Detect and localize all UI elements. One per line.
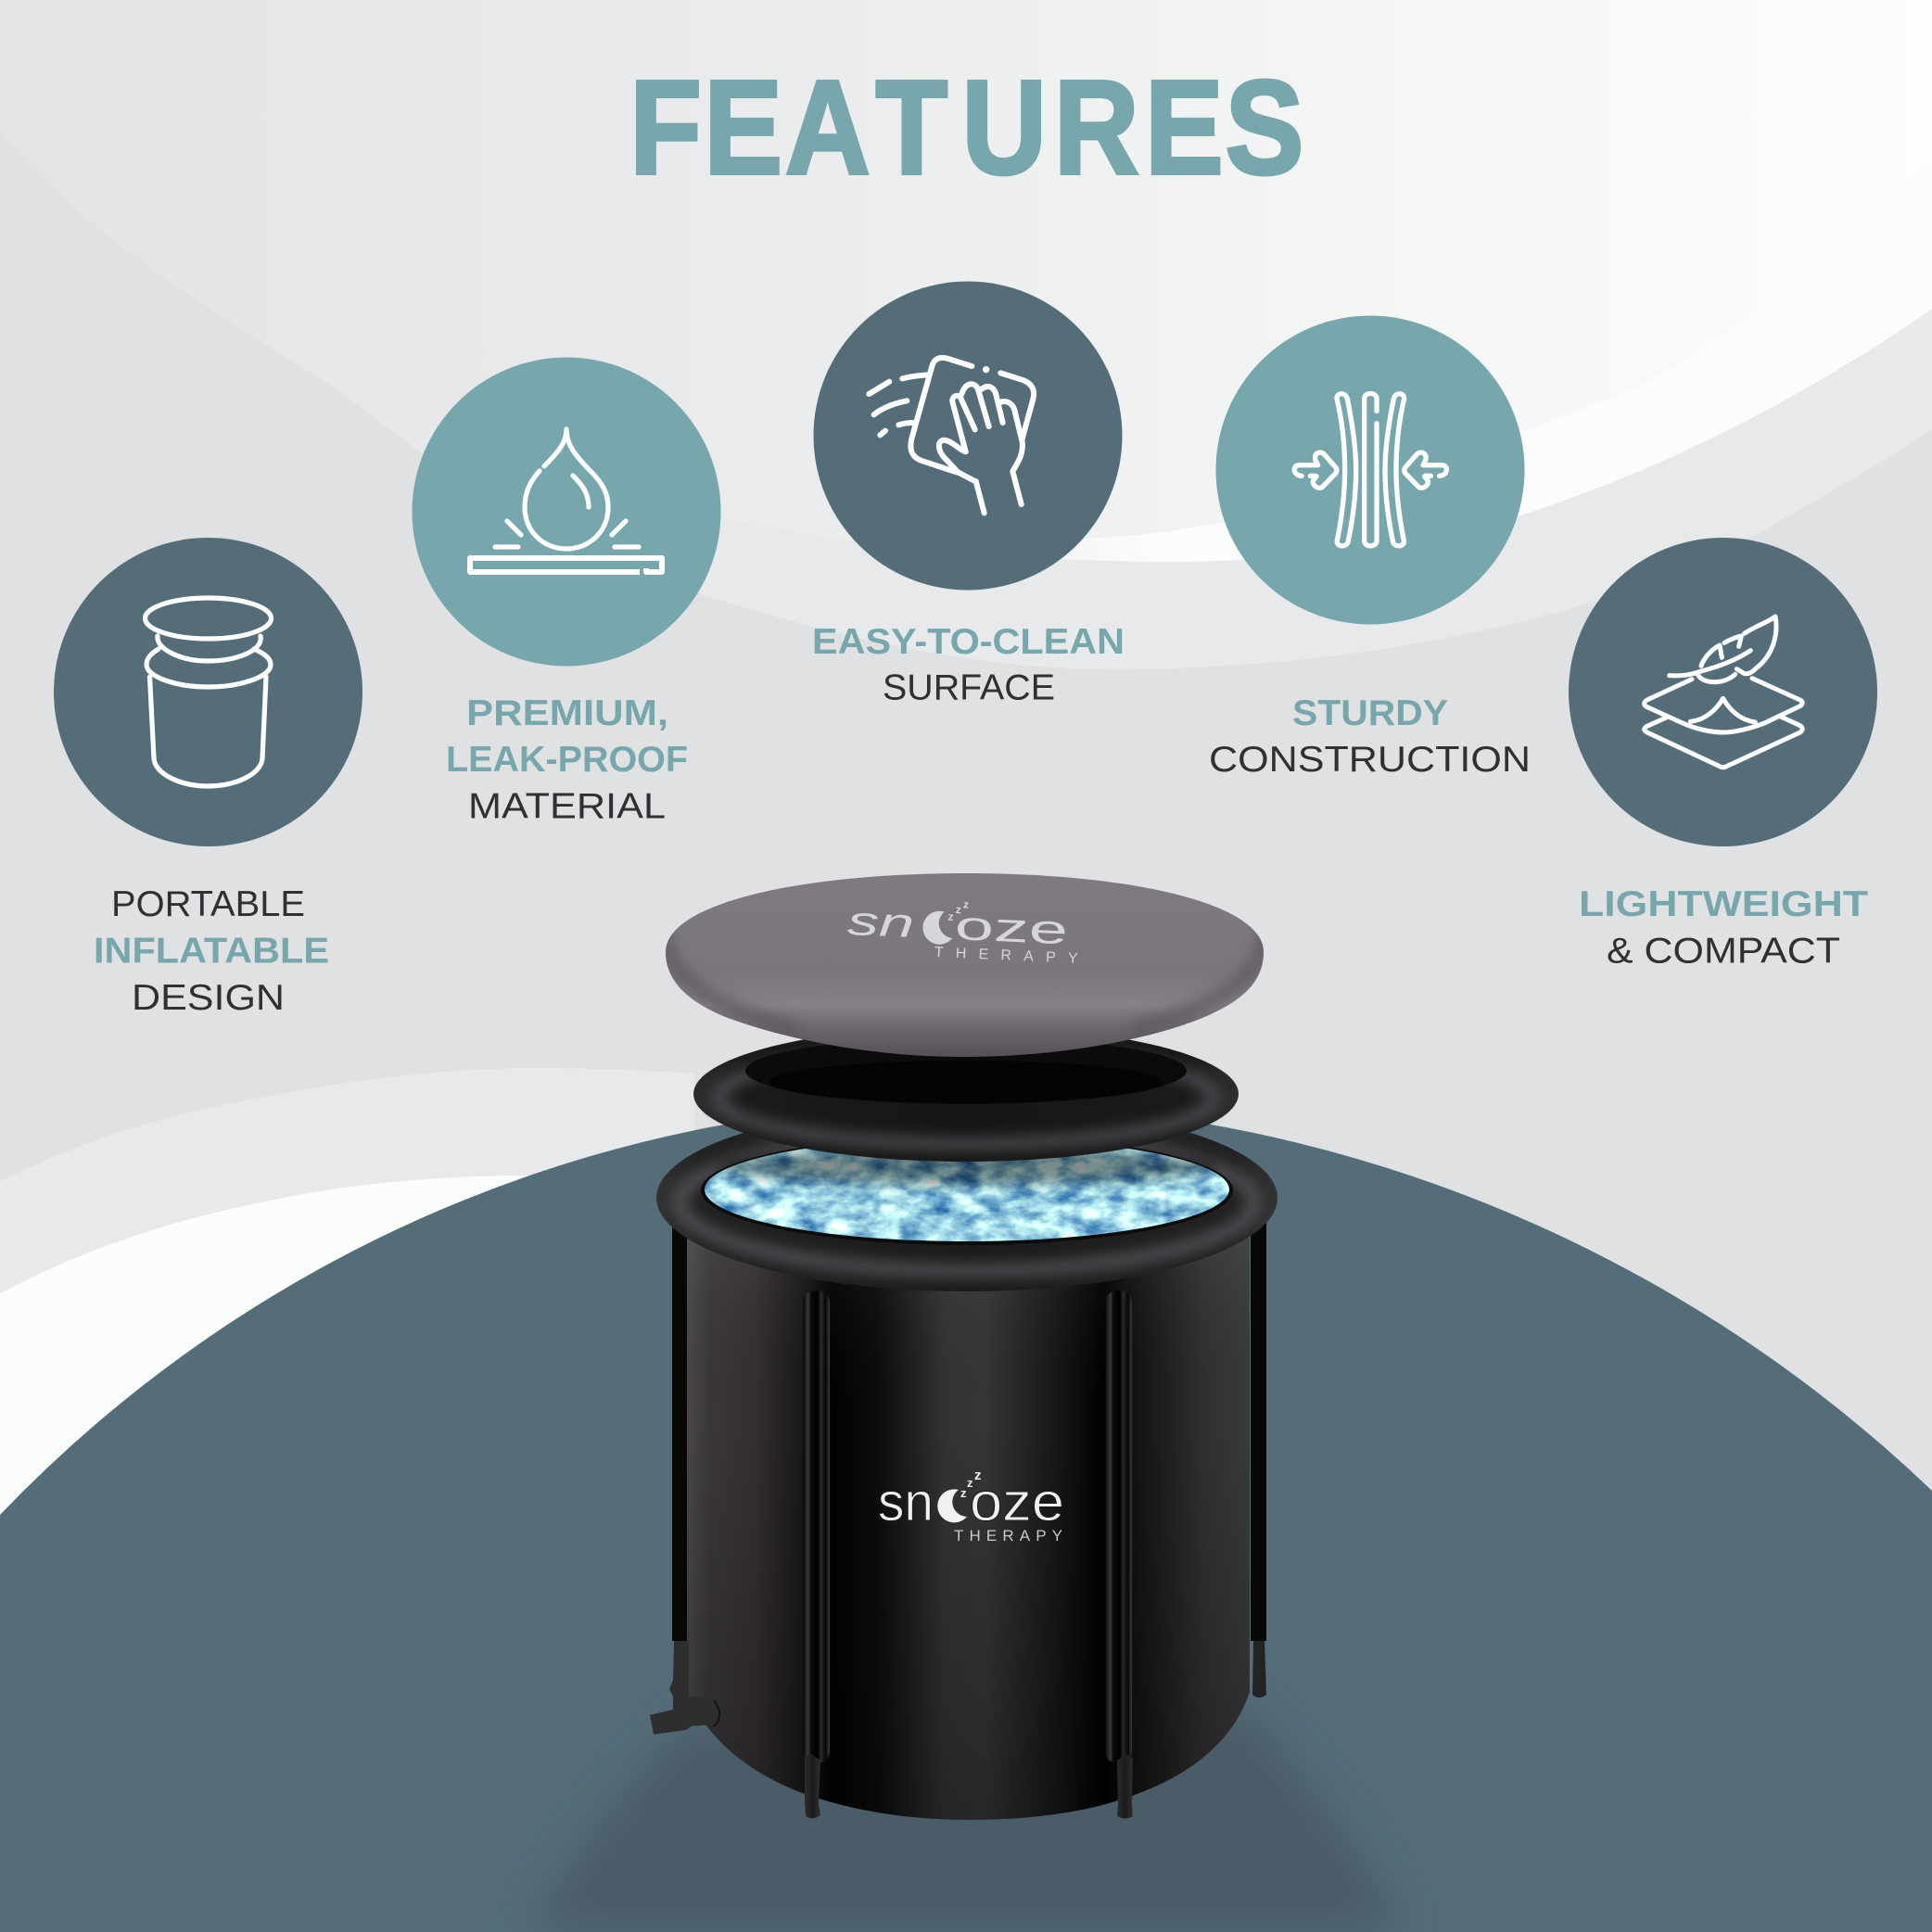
inflatable rim with ice bbox=[656, 1133, 1277, 1291]
side legs bbox=[672, 1205, 1266, 1697]
logo on tub: THERAPY bbox=[954, 1527, 1062, 1544]
label: lightweight and compact: LIGHTWEIGHT bbox=[1579, 884, 1868, 924]
logo on lid: oze bbox=[954, 903, 1069, 953]
icon: feather on layers bbox=[1569, 538, 1877, 846]
logo on tub: oze bbox=[970, 1472, 1064, 1532]
label: premium leak-proof material: MATERIAL bbox=[468, 786, 666, 827]
label: portable inflatable design: DESIGN bbox=[132, 978, 285, 1018]
label: premium leak-proof material: LEAK-PROOF bbox=[446, 740, 688, 780]
feature: lightweight and compact bbox=[1569, 538, 1877, 972]
logo on lid: z bbox=[947, 910, 954, 923]
logo on lid bbox=[845, 893, 1081, 967]
logo on tub: z bbox=[960, 1486, 967, 1500]
icon: hand wiping with cloth bbox=[814, 282, 1122, 590]
logo on tub: z bbox=[967, 1476, 973, 1490]
feature: sturdy construction bbox=[1209, 315, 1531, 780]
logo on lid: z bbox=[963, 897, 969, 911]
label: lightweight and compact bbox=[1579, 884, 1868, 972]
feature: portable inflatable design bbox=[54, 538, 362, 1018]
label: portable inflatable design: INFLATABLE bbox=[94, 931, 329, 972]
logo on tub: sn bbox=[878, 1472, 934, 1532]
logo on tub: z bbox=[974, 1468, 981, 1483]
label: lightweight and compact: & COMPACT bbox=[1607, 931, 1840, 972]
icon: water drop on surface bbox=[412, 358, 721, 666]
title: FEATURES bbox=[629, 52, 1303, 202]
label: sturdy construction: CONSTRUCTION bbox=[1209, 740, 1531, 780]
label: easy-to-clean surface: EASY-TO-CLEAN bbox=[812, 622, 1125, 662]
icon: collapsible tub bbox=[54, 538, 362, 846]
inflatable ring bbox=[693, 1026, 1239, 1185]
icon: bars pressed by arrows bbox=[1216, 315, 1524, 625]
label: sturdy construction bbox=[1209, 693, 1531, 780]
front legs bbox=[803, 1290, 1133, 1819]
feature: premium leak-proof material bbox=[412, 358, 721, 827]
label: portable inflatable design: PORTABLE bbox=[111, 884, 305, 924]
label: easy-to-clean surface bbox=[812, 622, 1125, 708]
label: portable inflatable design bbox=[94, 884, 329, 1018]
tub body bbox=[687, 1205, 1250, 1820]
feature: easy-to-clean surface bbox=[812, 282, 1125, 708]
label: premium leak-proof material bbox=[446, 693, 688, 827]
product: ice bath tub bbox=[650, 873, 1277, 1820]
label: sturdy construction: STURDY bbox=[1292, 693, 1448, 733]
label: easy-to-clean surface: SURFACE bbox=[883, 667, 1055, 708]
valve bbox=[650, 1641, 721, 1735]
lid bbox=[664, 873, 1265, 1057]
label: premium leak-proof material: PREMIUM, bbox=[466, 693, 668, 733]
logo on lid: THERAPY bbox=[934, 945, 1078, 967]
logo on lid: z bbox=[956, 903, 961, 916]
crushed ice bbox=[705, 1148, 1229, 1241]
logo on lid: sn bbox=[846, 898, 915, 947]
logo on tub bbox=[878, 1468, 1064, 1544]
